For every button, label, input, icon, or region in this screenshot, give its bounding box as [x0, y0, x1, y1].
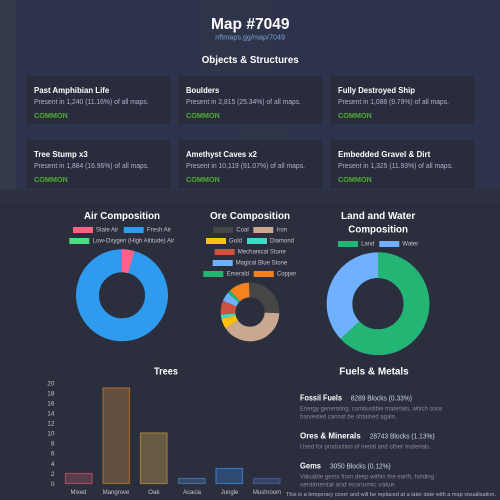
map link: nftmaps.gg/map/7049: [215, 34, 285, 42]
card: fully destroyed ship: Present in 1,088 (9.79%) of all maps.: [338, 97, 449, 106]
card: boulders: Boulders: [186, 85, 219, 95]
x axis labels: Jungle: [221, 489, 239, 496]
legend: air: [69, 226, 174, 244]
legend: ore: Diamond: [270, 237, 294, 244]
item: fossil fuels: Energy generating, combustible materials, which once: [300, 405, 443, 412]
item: ores and minerals: 28743 Blocks (1.13%): [370, 432, 435, 441]
card: fully destroyed ship: COMMON: [338, 111, 372, 120]
item: gems: Gems: [300, 462, 321, 471]
bars: [66, 388, 280, 484]
card: amethyst caves: Amethyst Caves x2: [186, 149, 257, 159]
y axis labels: 12: [47, 420, 55, 428]
card: embedded gravel and dirt: COMMON: [338, 175, 372, 184]
y axis labels: 14: [47, 410, 55, 418]
x axis labels: Mixed: [70, 489, 87, 496]
panel: land and water composition: [338, 211, 418, 342]
legend: ore: Emerald: [227, 270, 249, 277]
card: fully destroyed ship: Fully Destroyed Ship: [338, 85, 415, 95]
item: fossil fuels: [295, 388, 454, 424]
heading: fuels and metals: Fuels & Metals: [339, 367, 409, 378]
x axis labels: Mushroom: [253, 489, 281, 496]
heading: land and water composition: [341, 211, 415, 236]
x axis labels: Oak: [148, 489, 160, 496]
y axis labels: 16: [47, 400, 55, 408]
card: tree stump: Tree Stump x3: [34, 149, 88, 159]
heading: objects and structures: Objects & Structures: [202, 55, 299, 66]
heading: land and water composition: Composition: [348, 225, 408, 236]
x axis labels: Acacia: [183, 489, 201, 496]
y axis labels: 8: [51, 441, 55, 448]
title: Map #7049: [211, 16, 290, 33]
legend: land and water: [338, 240, 418, 248]
y axis labels: 2: [51, 471, 55, 478]
heading: air composition: Air Composition: [84, 211, 160, 222]
card: amethyst caves: COMMON: [186, 175, 220, 184]
card: tree stump: [26, 140, 170, 188]
card: fully destroyed ship: [330, 76, 474, 124]
footnote: temporary cover: This is a temporary cover and will be replaced at a later date with a map visualisation.: [286, 492, 496, 498]
y axis labels: 4: [51, 461, 55, 468]
legend: air: Fresh Air: [147, 226, 171, 234]
y axis labels: [47, 380, 55, 488]
legend: ore: Copper: [277, 270, 296, 277]
heading: trees: Trees: [154, 367, 178, 378]
y axis labels: 6: [51, 451, 55, 458]
panel: ore composition: [203, 211, 296, 334]
legend: ore: Iron: [277, 226, 287, 233]
y axis labels: 18: [47, 390, 55, 398]
heading: land and water composition: Land and Water: [341, 211, 415, 222]
legend: land and water: Land: [361, 240, 375, 248]
panel: fuels and metals: [295, 367, 454, 492]
panel: air composition: [69, 211, 174, 330]
card: boulders: Present in 2,815 (25.34%) of all maps.: [186, 97, 301, 106]
card: embedded gravel and dirt: Embedded Gravel & Dirt: [338, 149, 430, 159]
legend: land and water: Water: [402, 240, 418, 248]
donut chart: ore: [228, 290, 272, 334]
card: tree stump: COMMON: [34, 175, 68, 184]
card: amethyst caves: Present in 10,119 (91.07%) of all maps.: [186, 161, 305, 170]
legend: ore: Magical Blue Stone: [236, 259, 288, 266]
card: past amphibian life: Present in 1,240 (11.16%) of all maps.: [34, 97, 149, 106]
card: past amphibian life: Past Amphibian Life: [34, 85, 109, 95]
item: fossil fuels: harvested cannot be obtained again.: [300, 413, 397, 420]
item: gems: 3050 Blocks (0.12%): [330, 462, 391, 471]
card: amethyst caves: [178, 140, 322, 188]
heading: ore composition: Ore Composition: [210, 211, 290, 222]
x axis labels: Mangrove: [103, 489, 130, 496]
card: embedded gravel and dirt: [330, 140, 474, 188]
legend: ore: Gold: [229, 237, 242, 244]
y axis labels: 10: [47, 430, 55, 438]
legend: air: Low-Oxygen (High Altitude) Air: [93, 237, 174, 244]
card: tree stump: Present in 1,884 (16.96%) of all maps.: [34, 161, 149, 170]
x axis labels: [70, 489, 281, 496]
item: gems: sentimental and economic value.: [300, 481, 396, 488]
donut chart: land and water: [340, 265, 416, 342]
legend: ore: [203, 226, 296, 277]
card: past amphibian life: COMMON: [34, 111, 68, 120]
card: boulders: COMMON: [186, 111, 220, 120]
card: past amphibian life: [26, 76, 170, 124]
item: gems: Valuable gems from deep within the earth, holding: [300, 473, 435, 480]
item: ores and minerals: Used for production of metal and other materials.: [300, 443, 431, 450]
card: embedded gravel and dirt: Present in 1,325 (11.93%) of all maps.: [338, 161, 453, 170]
panel: trees bar chart: [47, 367, 281, 496]
card: boulders: [178, 76, 322, 124]
item: fossil fuels: 8289 Blocks (0.33%): [351, 394, 412, 403]
donut chart: air: [88, 261, 156, 330]
item: fossil fuels: Fossil Fuels: [300, 394, 342, 403]
legend: ore: Mechanical Stone: [238, 248, 286, 255]
item: gems: [295, 456, 454, 492]
item: ores and minerals: [295, 426, 454, 454]
y axis labels: 0: [51, 481, 55, 488]
panel: objects cards: [26, 76, 474, 188]
y axis labels: 20: [47, 380, 55, 388]
legend: air: Stale Air: [96, 226, 118, 234]
item: ores and minerals: Ores & Minerals: [300, 432, 361, 441]
legend: ore: Coal: [236, 226, 249, 233]
